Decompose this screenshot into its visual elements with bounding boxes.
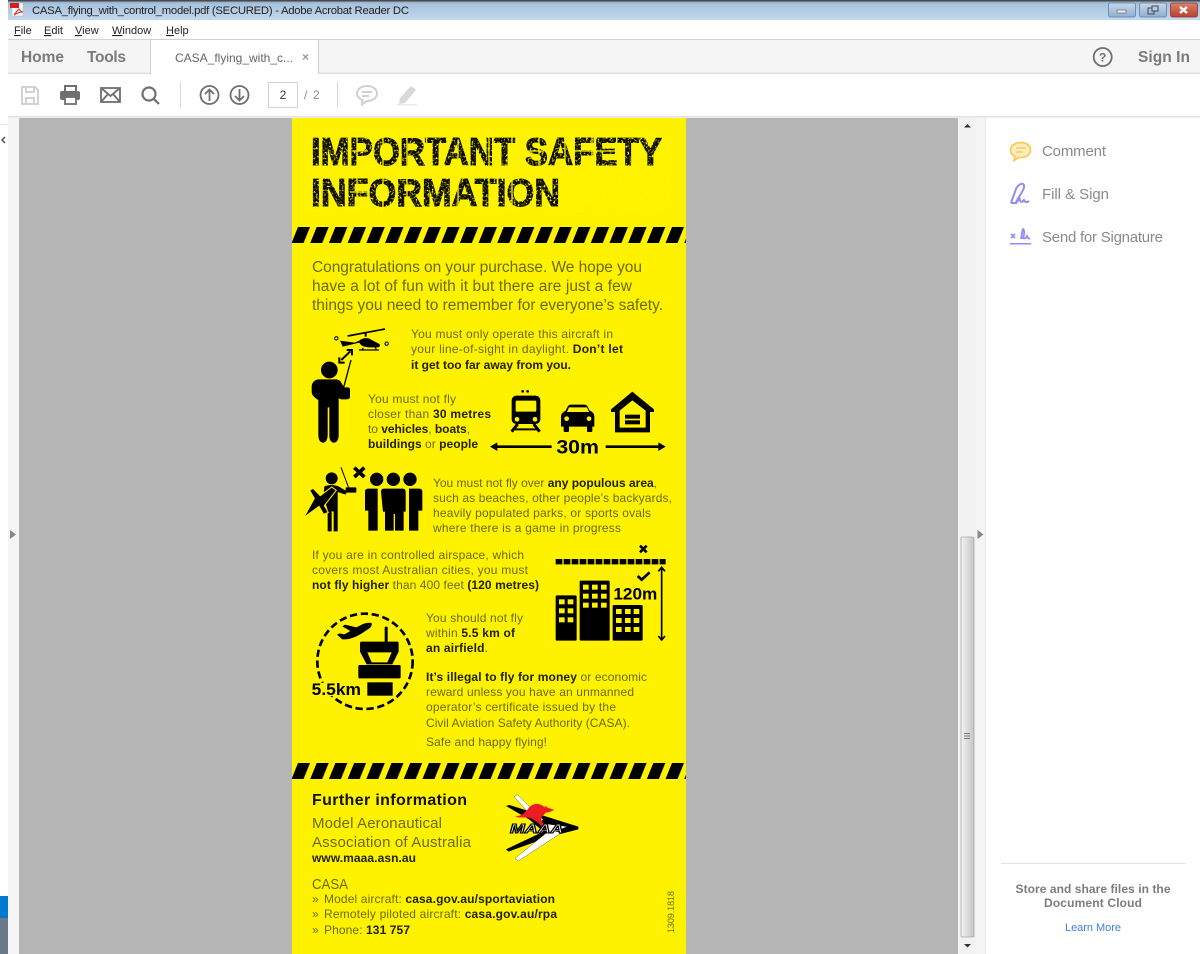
text: line of sight	[411, 327, 623, 372]
intro text: Congratulations on your purchase. We hope you	[312, 259, 642, 276]
text: CASA contacts: »	[312, 907, 319, 921]
text: 30 metres rule: closer than 30 metres	[368, 407, 491, 421]
label: 120m: 120m	[613, 584, 657, 603]
page number box	[268, 82, 320, 108]
icon: plane	[337, 623, 372, 639]
icon: next page	[230, 86, 248, 104]
text: CASA contacts: Remotely piloted aircraft: casa.gov.au/rpa	[324, 907, 557, 921]
icon: crowd	[365, 473, 422, 531]
text: illegal to fly for money	[426, 670, 647, 730]
text: illegal to fly for money: Civil Aviation Safety Authority (CASA).	[426, 716, 630, 730]
text: airfield distance: within 5.5 km of	[425, 626, 516, 640]
right collapse arrow	[978, 530, 984, 539]
toolbar	[22, 82, 417, 108]
icon: buildings	[556, 581, 643, 641]
text: populous areas: You must not fly over any populous area,	[433, 476, 657, 490]
text: illegal to fly for money: operator’s certificate issued by the	[426, 700, 616, 714]
text: controlled airspace: If you are in controlled airspace, which	[312, 548, 524, 562]
icons: train car house with 30m arrow	[490, 390, 666, 458]
page number box: 2	[313, 88, 320, 102]
icon: airfield 5.5km radius	[311, 614, 413, 709]
text: controlled airspace: not fly higher than 400 feet (120 metres)	[312, 578, 539, 592]
tool: comment	[1010, 142, 1107, 160]
tool: fill and sign: Fill & Sign	[1042, 186, 1109, 203]
icon: save	[22, 87, 38, 104]
tool: send for signature: Send for Signature	[1042, 229, 1163, 246]
heading: further information: Further information	[312, 792, 467, 809]
tool: comment: Comment	[1042, 143, 1107, 160]
dashed radius circle	[317, 614, 413, 709]
panel: safety information page	[292, 118, 686, 954]
text: CASA contacts: Model aircraft: casa.gov.au/sportaviation	[324, 892, 555, 906]
text: populous areas	[432, 476, 672, 535]
intro text: have a lot of fun with it but there are just a few	[312, 278, 633, 295]
text: 30 metres rule: You must not fly	[368, 392, 456, 406]
tab: active document	[150, 40, 318, 75]
tab: active document: ×	[302, 50, 309, 64]
text: airfield distance: You should not fly	[426, 611, 523, 625]
icon: house	[611, 392, 654, 432]
menu bar: Edit	[44, 25, 63, 37]
sign in: Sign In	[1138, 49, 1190, 66]
text: line of sight: it get too far away from you.	[411, 358, 571, 372]
icon: pilot with helicopter	[312, 329, 388, 443]
text: illegal to fly for money: reward unless you have an unmanned	[426, 685, 634, 699]
document cloud promo	[1016, 882, 1171, 934]
text: 30 metres rule: to vehicles, boats,	[368, 422, 470, 436]
arrow: height	[658, 567, 665, 640]
arrow: left	[490, 442, 552, 451]
menu bar: File	[14, 25, 32, 37]
document cloud promo: Document Cloud	[1044, 896, 1142, 910]
page number box: /	[304, 88, 308, 102]
icon: mail	[101, 88, 120, 102]
heading: important safety information: INFORMATION	[311, 172, 560, 215]
icon: comment disabled	[357, 86, 377, 104]
text: controlled airspace	[312, 548, 539, 592]
icon: kangaroo	[515, 804, 554, 829]
icon: pdf file	[10, 3, 23, 16]
icon: highlight disabled	[397, 86, 417, 106]
icon: helicopter	[335, 329, 388, 350]
taskbar sliver	[0, 896, 8, 954]
menu bar: View	[75, 25, 99, 37]
icon: 120m height limit over buildings	[556, 546, 666, 641]
label: 5.5km	[311, 683, 362, 696]
tab bar	[8, 39, 1200, 75]
text: CASA contacts: Phone: 131 757	[324, 923, 410, 937]
menu bar: Help	[166, 25, 189, 37]
text: populous areas: such as beaches, other people’s backyards,	[433, 491, 672, 505]
intro text	[312, 259, 663, 314]
icon: pilot with plane	[304, 467, 356, 531]
icon: pilot over crowd	[304, 467, 422, 531]
icon: search	[142, 88, 159, 104]
menu bar: Window	[112, 25, 151, 37]
icon: airfield 5.5km radius: 5.5km	[312, 680, 361, 699]
icon: cross	[640, 546, 647, 552]
label: 30m: 30m	[556, 437, 599, 458]
text: populous areas: heavily populated parks, or sports ovals	[433, 506, 651, 520]
text: model aeronautical association: Association of Australia	[312, 834, 472, 851]
heading: important safety information: IMPORTANT SAFETY	[311, 131, 662, 174]
document code: 1309.1818	[666, 891, 676, 933]
scrollbar	[959, 118, 984, 954]
icon: pilot figure	[312, 360, 351, 443]
icon: help: ?	[1099, 50, 1106, 64]
window buttons	[1108, 3, 1198, 17]
arrow: right	[606, 442, 666, 451]
text: line of sight: You must only operate this aircraft in	[411, 327, 613, 341]
text: CASA contacts: CASA	[312, 877, 348, 893]
intro text: things you need to remember for everyone’s safety.	[312, 297, 663, 314]
logo lettering: MAAA	[510, 822, 563, 836]
tab labels: home and tools: Tools	[87, 49, 126, 66]
icon: control tower	[358, 627, 401, 696]
document cloud promo: Learn More	[1065, 922, 1121, 934]
logo: MAAA	[506, 795, 578, 861]
text: airfield distance: an airfield.	[426, 641, 488, 655]
text: controlled airspace: covers most Australian cities, you must	[312, 563, 529, 577]
title bar	[8, 0, 1200, 20]
page number box: 2	[280, 88, 287, 102]
text: model aeronautical association	[311, 815, 472, 865]
text: model aeronautical association: Model Aeronautical	[312, 815, 442, 832]
ceiling dashed line	[556, 554, 666, 570]
text: model aeronautical association: www.maaa.asn.au	[311, 851, 416, 865]
heading: important safety information	[305, 130, 670, 215]
icon: distance arrow	[339, 350, 352, 363]
text: populous areas: where there is a game in progress	[432, 521, 621, 535]
right side panel	[985, 118, 1200, 954]
tab: active document: CASA_flying_with_c...	[175, 51, 293, 65]
tab labels: home and tools: Home	[21, 49, 64, 66]
text: sign-off: Safe and happy flying!	[426, 735, 547, 749]
document cloud promo: Store and share files in the	[1016, 882, 1171, 896]
menu bar	[14, 25, 189, 37]
left collapse arrow	[10, 530, 16, 539]
close marker	[2, 137, 5, 143]
text: CASA contacts	[312, 877, 557, 937]
hazard stripe band: top	[292, 227, 686, 243]
icon: cross	[354, 468, 364, 477]
hazard stripe band: bottom	[292, 763, 686, 779]
icon: car	[561, 405, 594, 432]
text: CASA contacts: »	[312, 923, 319, 937]
text: 30 metres rule: buildings or people	[368, 437, 478, 451]
text: 30 metres rule	[368, 392, 491, 451]
text: line of sight: your line-of-sight in daylight. Don’t let	[411, 342, 623, 356]
tool: fill and sign	[1011, 184, 1109, 203]
text: airfield distance	[425, 611, 523, 655]
window title text: CASA_flying_with_control_model.pdf (SECURED) - Adobe Acrobat Reader DC	[32, 5, 409, 17]
icon: train	[512, 390, 540, 432]
icon: check	[638, 572, 650, 580]
text: CASA contacts: »	[312, 892, 319, 906]
icon: print	[60, 86, 80, 104]
icon: help	[1094, 48, 1112, 66]
tab labels: home and tools	[21, 49, 126, 66]
text: illegal to fly for money: It’s illegal to fly for money or economic	[426, 670, 647, 684]
icon: previous page	[200, 86, 218, 104]
